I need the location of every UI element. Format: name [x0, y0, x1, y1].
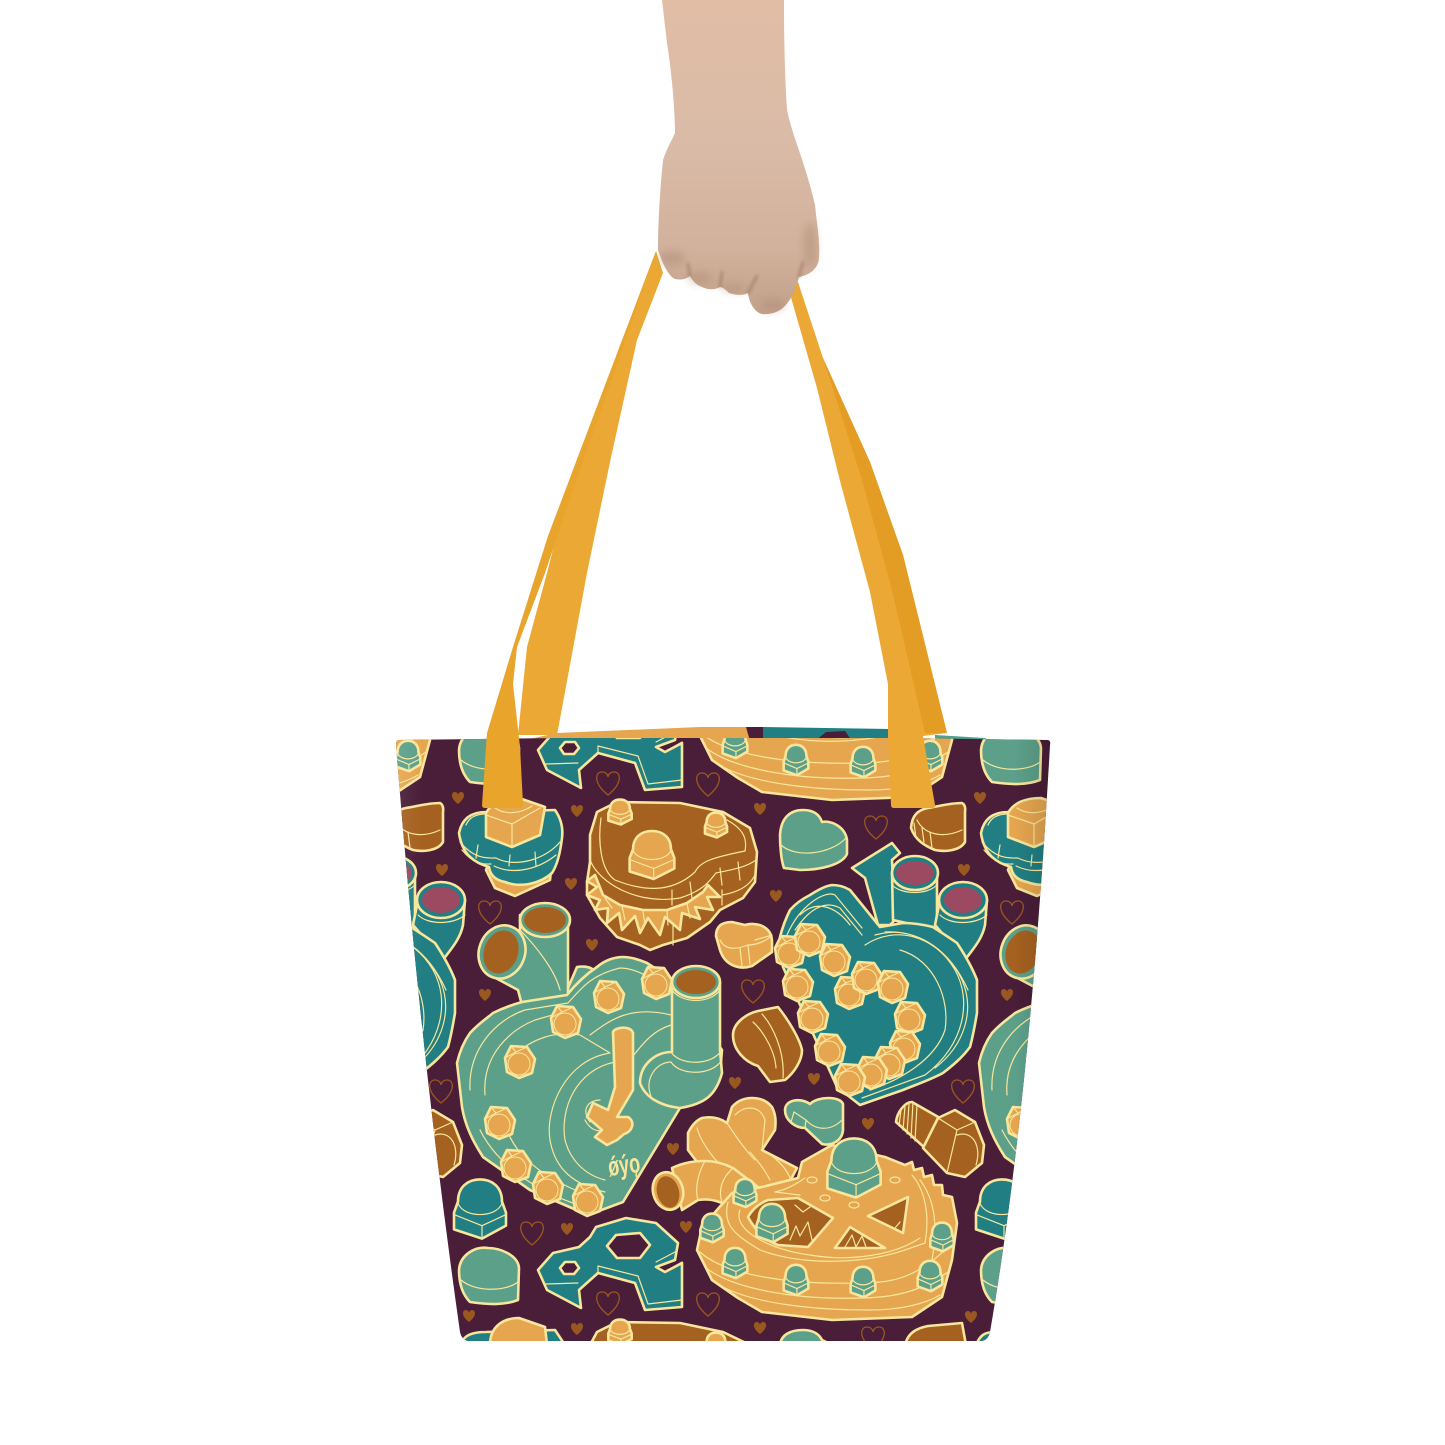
small brown heart block — [911, 803, 965, 851]
light teal heart box — [780, 810, 847, 870]
back panel of bag visible above rim — [520, 727, 990, 741]
front strap left — [482, 251, 656, 808]
front strap right — [790, 279, 947, 808]
hand and forearm — [658, 0, 819, 314]
small teal heart — [785, 1098, 843, 1144]
repeats cut by right edge — [974, 796, 1047, 1304]
teal stack with orange bolt — [459, 798, 562, 896]
brown plug heart — [733, 1007, 802, 1082]
big orange gear heart with pipes — [649, 1098, 957, 1320]
dark teal acorn nut — [454, 1179, 506, 1239]
pattern cut by bottom edge — [463, 1316, 990, 1341]
repeats cut by left edge — [401, 802, 466, 1178]
edge shading — [396, 740, 1050, 1058]
small orange heart — [716, 922, 772, 967]
dark teal wrench — [538, 1218, 682, 1310]
repeats cut by top edge — [396, 738, 1042, 802]
back strap left — [518, 251, 663, 735]
small heart scatter — [430, 772, 1409, 1350]
finger separations — [688, 262, 803, 293]
brown heart with gear — [587, 800, 757, 950]
plum fabric — [390, 735, 1060, 1345]
brown bolt — [896, 1102, 984, 1177]
big light teal mechanical heart — [457, 903, 722, 1216]
big dark teal heart with nut ring — [775, 843, 987, 1105]
tote bag body — [396, 738, 1050, 1341]
knuckle shading — [659, 223, 817, 311]
light teal heart block — [459, 1248, 519, 1304]
